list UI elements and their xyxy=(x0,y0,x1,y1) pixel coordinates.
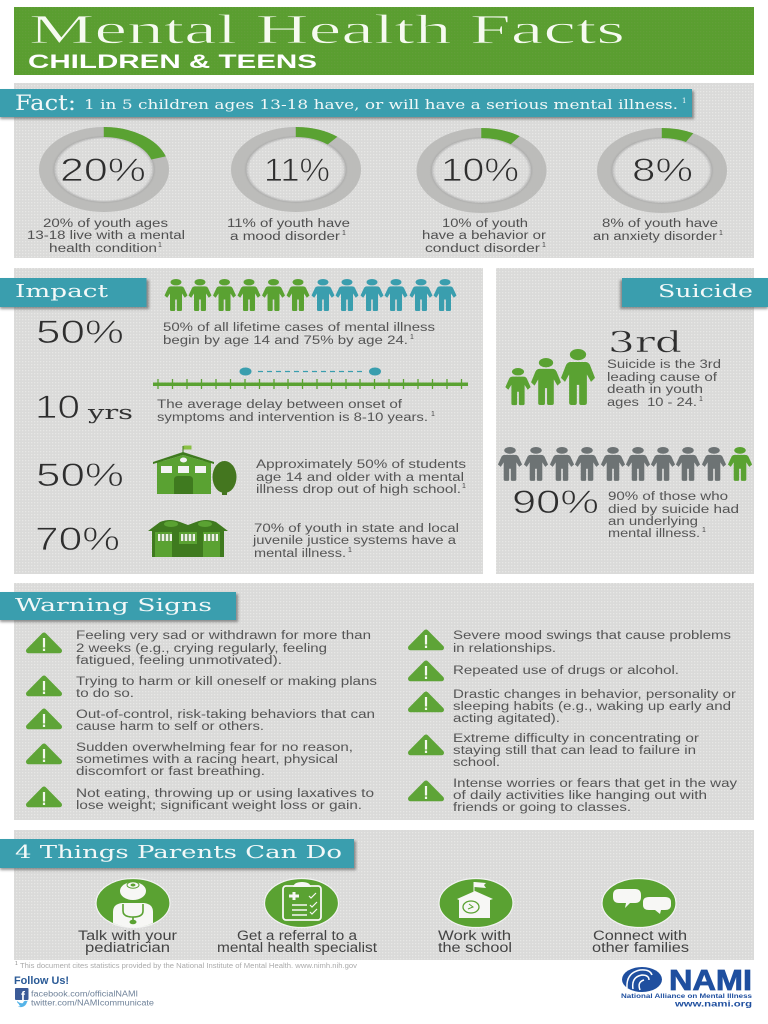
follow us: Follow Us! xyxy=(14,975,69,987)
label: clipboard: Get a referral to a xyxy=(237,928,358,943)
label: clipboard xyxy=(217,928,377,955)
icon: juvenile justice building xyxy=(148,520,228,557)
logo: NAMI: National Alliance on Mental Illness xyxy=(621,993,752,1000)
warning: intense worries: Intense worries or fears that get in the way xyxy=(453,778,737,790)
ribbon: warning signs: Warning Signs xyxy=(15,595,212,616)
warning: not eating: Not eating, throwing up or using laxatives to xyxy=(76,788,374,800)
warning: fear: discomfort or fast breathing. xyxy=(76,766,265,778)
text: lifetime cases: 1 xyxy=(410,334,414,341)
text: juvenile justice: 1 xyxy=(348,547,352,554)
warning: risk-taking xyxy=(28,709,375,733)
text: lifetime cases: 50% of all lifetime cases of mental illness xyxy=(163,322,435,334)
text: underlying illness: 1 xyxy=(702,527,706,534)
logo: NAMI: www.nami.org xyxy=(674,998,752,1008)
label: pediatrician: pediatrician xyxy=(85,940,170,955)
text: underlying illness xyxy=(608,491,739,540)
text: dropout: age 14 and older with a mental xyxy=(256,472,464,484)
ribbon: suicide: Suicide xyxy=(658,281,753,302)
caption: 20%: 1 xyxy=(158,242,162,249)
warning: drastic changes: acting agitated). xyxy=(453,713,560,725)
text: average delay xyxy=(157,399,435,424)
label: pediatrician: Talk with your xyxy=(78,928,178,943)
warning: concentrating: staying still that can lead to failure in xyxy=(453,745,696,757)
caption: 10%: 10% of youth xyxy=(442,218,528,230)
ribbon: impact: Impact xyxy=(15,281,109,302)
caption: 20%: 13-18 live with a mental xyxy=(27,230,185,242)
label: families: Connect with xyxy=(593,928,687,943)
follow us xyxy=(14,975,155,1008)
timeline xyxy=(153,368,468,389)
ribbon: parents xyxy=(0,839,356,870)
icon row: twelve people xyxy=(164,279,456,311)
label: school xyxy=(438,928,512,955)
icon: clipboard xyxy=(264,878,338,928)
ribbon: suicide xyxy=(620,278,768,309)
caption: 10% xyxy=(422,218,546,255)
ribbon: parents: 4 Things Parents Can Do xyxy=(15,842,342,863)
follow us: twitter.com/NAMIcommunicate xyxy=(31,998,155,1008)
caption: 20% xyxy=(27,218,185,255)
text: lifetime cases xyxy=(163,322,435,347)
text: third leading cause: 1 xyxy=(699,396,703,403)
text: third leading cause: ages 10 - 24. xyxy=(607,397,697,409)
text: third leading cause: Suicide is the 3rd xyxy=(607,359,721,371)
warning: drugs or alcohol xyxy=(410,663,679,679)
caption: 8%: an anxiety disorder xyxy=(593,231,717,243)
text: underlying illness: an underlying xyxy=(608,516,698,528)
label: pediatrician xyxy=(78,928,178,955)
warning: drastic changes: sleeping habits (e.g., waking up early and xyxy=(453,701,731,713)
warning: intense worries: of daily activities like hanging out with xyxy=(453,790,707,802)
panel: impact xyxy=(0,268,483,574)
label: families xyxy=(592,928,689,955)
text: underlying illness: mental illness. xyxy=(608,528,700,540)
warning: fear: Sudden overwhelming fear for no reason, xyxy=(76,742,353,754)
icon: school with tree xyxy=(153,446,236,495)
warning: concentrating: school. xyxy=(453,757,500,769)
warning: fear xyxy=(28,742,353,778)
label: families: other families xyxy=(592,940,689,955)
panel: warning signs xyxy=(0,583,754,820)
icon: facebook xyxy=(15,988,28,1003)
stat: 3rd: 3rd xyxy=(608,325,682,359)
text: dropout: Approximately 50% of students xyxy=(256,459,466,471)
warning: drugs or alcohol: Repeated use of drugs or alcohol. xyxy=(453,665,679,677)
stat: 50% dropout: 50% xyxy=(36,457,124,493)
warning: sad or withdrawn xyxy=(28,630,371,667)
label: school: the school xyxy=(438,940,512,955)
caption: 20%: health condition xyxy=(49,243,157,255)
text: average delay: 1 xyxy=(431,411,435,418)
logo globe xyxy=(622,967,662,992)
stat: 70%: 70% xyxy=(35,521,120,557)
donut: 20%: 20% xyxy=(60,152,146,188)
donut: 11% xyxy=(239,132,353,207)
text: dropout: illness drop out of high school. xyxy=(256,484,461,496)
icon: twitter xyxy=(17,1000,28,1007)
warning: mood swings xyxy=(410,630,731,655)
stat: 10 yrs xyxy=(35,389,133,425)
caption: 11% xyxy=(227,218,350,243)
logo: NAMI: NAMI xyxy=(669,965,752,997)
caption: 10%: 1 xyxy=(542,242,546,249)
donut: 11%: 11% xyxy=(264,152,330,188)
warning: sad or withdrawn: Feeling very sad or withdrawn for more than xyxy=(76,630,371,642)
ribbon: warning signs xyxy=(0,592,238,622)
caption: 11%: 1 xyxy=(342,230,346,237)
text: average delay: The average delay between onset of xyxy=(157,399,403,411)
warning: intense worries: friends or going to classes. xyxy=(453,802,631,814)
caption: 8%: 1 xyxy=(719,230,723,237)
text: average delay: symptoms and intervention is 8-10 years. xyxy=(157,412,428,424)
stat: 10 yrs: yrs xyxy=(87,400,133,424)
panel: parents xyxy=(0,830,754,960)
text: third leading cause: death in youth xyxy=(607,384,703,396)
icon: pediatrician xyxy=(96,878,170,928)
text: underlying illness: 90% of those who xyxy=(608,491,728,503)
warning: mood swings: Severe mood swings that cause problems xyxy=(453,630,731,642)
icon: family of three xyxy=(505,349,595,405)
footnote: This document cites statistics provided by the National Institute of Mental Health. www.nimh.nih.gov xyxy=(20,961,357,970)
stat: 90%: 90% xyxy=(512,484,599,520)
text: third leading cause xyxy=(607,359,721,409)
ribbon: fact: 1 xyxy=(682,97,686,105)
icon row: ten people xyxy=(498,447,752,481)
text: dropout xyxy=(256,459,466,496)
warning: risk-taking: cause harm to self or others. xyxy=(76,721,264,733)
stat: 10 yrs: 10 xyxy=(35,389,80,425)
icon: speech bubbles xyxy=(602,878,676,928)
caption: 10%: conduct disorder xyxy=(425,243,540,255)
donut: 20% xyxy=(47,132,161,207)
ribbon: fact xyxy=(0,89,694,119)
donut: 8% xyxy=(605,133,719,208)
caption: 8%: 8% of youth have xyxy=(602,218,718,230)
stat: 50% lifetime: 50% xyxy=(36,314,124,350)
caption: 11%: a mood disorder xyxy=(230,231,340,243)
title: Mental Health Facts xyxy=(29,6,625,52)
caption: 10%: have a behavior or xyxy=(422,230,546,242)
text: juvenile justice: juvenile justice systems have a xyxy=(252,535,457,547)
logo: NAMI xyxy=(621,965,752,1008)
label: clipboard: mental health specialist xyxy=(217,940,377,955)
footnote: 1 xyxy=(15,961,18,967)
warning: sad or withdrawn: 2 weeks (e.g., crying regularly, feeling xyxy=(76,643,327,655)
ribbon: fact: Fact: xyxy=(15,91,76,115)
subtitle: CHILDREN & TEENS xyxy=(28,51,317,73)
text: juvenile justice xyxy=(252,523,459,560)
warning: risk-taking: Out-of-control, risk-taking behaviors that can xyxy=(76,709,375,721)
warning: mood swings: in relationships. xyxy=(453,643,556,655)
ribbon: fact: 1 in 5 children ages 13-18 have, or will have a serious mental illness. xyxy=(84,98,678,113)
text: third leading cause: leading cause of xyxy=(607,372,718,384)
follow us: facebook.com/officialNAMI xyxy=(31,990,138,998)
ribbon: impact xyxy=(0,278,149,309)
caption: 11%: 11% of youth have xyxy=(227,218,350,230)
donut: 8%: 8% xyxy=(632,152,693,188)
warning: harm: to do so. xyxy=(76,688,134,700)
caption: 20%: 20% of youth ages xyxy=(43,218,168,230)
text: lifetime cases: begin by age 14 and 75% by age 24. xyxy=(163,335,408,347)
warning: concentrating: Extreme difficulty in concentrating or xyxy=(453,733,699,745)
icon: school clock xyxy=(439,878,513,928)
donut: 10%: 10% xyxy=(441,152,519,188)
panel: suicide xyxy=(496,268,768,574)
warning: concentrating xyxy=(410,733,699,769)
warning: intense worries xyxy=(410,778,737,814)
warning: fear: sometimes with a racing heart, physical xyxy=(76,754,338,766)
warning: not eating: lose weight; significant weight loss or gain. xyxy=(76,800,362,812)
panel: fact xyxy=(0,83,754,258)
warning: sad or withdrawn: fatigued, feeling unmotivated). xyxy=(76,655,282,667)
warning: drastic changes xyxy=(410,689,736,725)
text: dropout: 1 xyxy=(462,483,466,490)
text: juvenile justice: 70% of youth in state and local xyxy=(254,523,459,535)
text: juvenile justice: mental illness. xyxy=(254,548,346,560)
warning: harm xyxy=(28,676,377,700)
title banner xyxy=(14,6,754,75)
caption: 8% xyxy=(593,218,723,243)
text: underlying illness: died by suicide had xyxy=(608,504,739,516)
warning: harm: Trying to harm or kill oneself or making plans xyxy=(76,676,377,688)
donut: 10% xyxy=(424,133,539,208)
label: school: Work with xyxy=(438,928,511,943)
icon: facebook: f xyxy=(21,989,26,1003)
warning: not eating xyxy=(28,788,374,812)
warning: drastic changes: Drastic changes in behavior, personality or xyxy=(453,689,736,701)
